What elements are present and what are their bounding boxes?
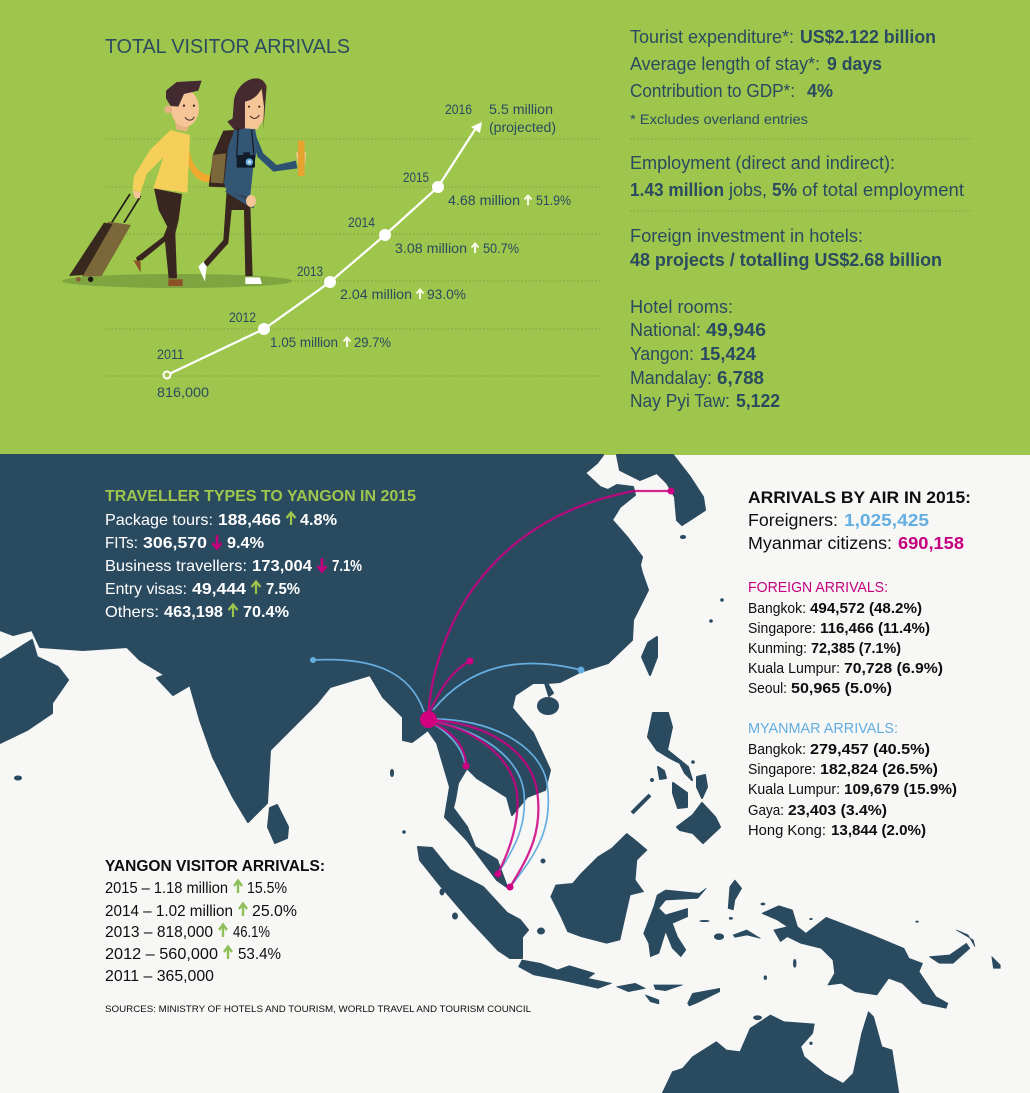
stats: tourism figures [630, 27, 936, 127]
stats: foreign investment: Foreign investment in hotels: [630, 226, 863, 246]
icon: suitcase [69, 194, 141, 282]
list: Myanmar arrivals: 23,403 (3.4%) [788, 803, 887, 819]
list: Myanmar arrivals: Gaya: [748, 803, 784, 819]
list: foreign arrivals: 50,965 (5.0%) [791, 681, 892, 697]
stats: hotel rooms: 6,788 [717, 368, 764, 388]
panel: Yangon visitor arrivals: 2015 – 1.18 million [105, 880, 228, 897]
panel: Yangon visitor arrivals [105, 858, 325, 985]
man [133, 81, 235, 286]
label: 2013 [297, 264, 466, 302]
label: 2014: 3.08 million [395, 241, 467, 256]
stats: hotel rooms: Hotel rooms: [630, 297, 733, 317]
row: FITs [105, 535, 264, 552]
stats: foreign investment [630, 226, 942, 270]
label: 2012: 29.7% [354, 335, 391, 350]
title: total visitor arrivals: TOTAL VISITOR ARRIVALS [105, 36, 350, 58]
row: business travellers: Business travellers: [105, 558, 247, 575]
stats: tourism figures: 9 days [827, 54, 882, 74]
heading: YANGON VISITOR ARRIVALS: [105, 858, 325, 875]
label: 2016 [445, 102, 556, 135]
label: 2016: (projected) [489, 120, 556, 135]
list: foreign arrivals: Kuala Lumpur: [748, 661, 840, 677]
stats: hotel rooms: Nay Pyi Taw: [630, 391, 730, 411]
panel: Yangon visitor arrivals: 2012 – 560,000 [105, 946, 218, 963]
stats: tourism figures: 4% [807, 81, 833, 101]
route: Seoul [428, 491, 671, 719]
list: foreign arrivals [748, 580, 943, 697]
panel: Yangon visitor arrivals: 2014 – 1.02 million [105, 903, 233, 920]
list: foreign arrivals: 494,572 (48.2%) [810, 601, 922, 617]
row: others: 463,198 [164, 604, 223, 621]
row: entry visas [105, 581, 300, 598]
label: 2012: 1.05 million [270, 335, 338, 350]
land: mainland Asia [0, 455, 648, 887]
stats: employment: jobs, [728, 180, 767, 200]
list: Myanmar arrivals: MYANMAR ARRIVALS: [748, 721, 898, 737]
stats: hotel rooms: Yangon: [630, 344, 694, 364]
list: Myanmar arrivals: 109,679 (15.9%) [844, 782, 957, 798]
routes: Kuala Lumpur [430, 721, 524, 873]
row: others: Others: [105, 604, 159, 621]
stats: tourism figures: US$2.122 billion [800, 27, 936, 47]
heading: ARRIVALS BY AIR IN 2015: [748, 488, 971, 507]
route: Gaya [313, 660, 424, 712]
map: South-East Asia [0, 455, 1000, 1093]
panel: arrivals by air: Myanmar citizens: [748, 533, 892, 553]
list: Myanmar arrivals: Singapore: [748, 762, 816, 778]
label: 2011: 2011 [157, 347, 184, 362]
stats: hotel rooms: Mandalay: [630, 368, 712, 388]
stats: tourism figures: * Excludes overland entries [630, 112, 808, 127]
row: package tours: 4.8% [300, 512, 337, 529]
land: Sri Lanka [268, 805, 288, 843]
label: 2012 [229, 310, 391, 350]
label: 2016: 2016 [445, 102, 472, 117]
panel: Yangon visitor arrivals: 53.4% [238, 946, 281, 963]
panel: arrivals by air: 690,158 [898, 533, 964, 553]
line chart: arrivals 2011-2016 [157, 102, 571, 400]
panel: Yangon visitor arrivals: 25.0% [252, 903, 297, 920]
route: Bangkok [430, 722, 465, 764]
list: Myanmar arrivals: 13,844 (2.0%) [831, 823, 926, 839]
row: entry visas: 49,444 [192, 581, 246, 598]
label: 2015: 2015 [403, 170, 429, 185]
panel: arrivals by air: Foreigners: [748, 510, 838, 530]
stats: hotel rooms: 15,424 [700, 344, 756, 364]
heading: TRAVELLER TYPES TO YANGON IN 2015 [105, 488, 416, 505]
label: 2015: 4.68 million [448, 193, 520, 208]
row: FITs: 9.4% [227, 535, 264, 552]
stats: employment: of total employment [802, 180, 964, 200]
list: Myanmar arrivals: Kuala Lumpur: [748, 782, 840, 798]
stats: employment: Employment (direct and indirect): [630, 153, 895, 173]
label: 2016: 5.5 million [489, 102, 553, 117]
label: 2013: 93.0% [427, 287, 466, 302]
route: Kunming [428, 661, 470, 715]
land: Philippines [648, 713, 692, 780]
stats: tourism figures: Average length of stay*: [630, 54, 820, 74]
list: Myanmar arrivals: 182,824 (26.5%) [820, 762, 938, 778]
stats: employment [630, 153, 964, 200]
stats: hotel rooms [630, 297, 780, 411]
ground shadow [62, 274, 293, 288]
icon: camera [237, 152, 255, 168]
row: FITs: 306,570 [143, 535, 207, 552]
land: Sumatra [418, 847, 528, 958]
list: foreign arrivals: Singapore: [748, 621, 816, 637]
row: business travellers [105, 558, 362, 575]
label: 2012: 2012 [229, 310, 256, 325]
land: Taiwan [642, 637, 657, 675]
label: 2014 [348, 215, 519, 256]
stats: hotel rooms: National: [630, 320, 701, 340]
label: 2015: 51.9% [536, 193, 571, 208]
stats: hotel rooms: 5,122 [736, 391, 780, 411]
land: eastern Indonesia, New Guinea, Australia [519, 833, 1000, 1093]
routes: Singapore [430, 719, 548, 887]
row: package tours: 188,466 [218, 512, 281, 529]
panel: Yangon visitor arrivals: 2013 – 818,000 [105, 924, 213, 941]
land: Korea [617, 455, 705, 525]
stats: foreign investment: 48 projects / totalling US$2.68 billion [630, 250, 942, 270]
row: entry visas: Entry visas: [105, 581, 187, 598]
list: foreign arrivals: Bangkok: [748, 601, 806, 617]
row: package tours [105, 512, 337, 529]
list: foreign arrivals: 116,466 (11.4%) [820, 621, 930, 637]
row: others [105, 604, 289, 621]
row: package tours: Package tours: [105, 512, 213, 529]
label: 2011 [157, 347, 209, 400]
row: FITs: FITs: [105, 535, 138, 552]
route: Hong Kong [433, 663, 581, 710]
label: 2014: 2014 [348, 215, 375, 230]
stats: hotel rooms: 49,946 [706, 320, 766, 340]
row: entry visas: 7.5% [266, 581, 300, 598]
row: business travellers: 173,004 [252, 558, 312, 575]
stats: employment: 5% [772, 180, 797, 200]
row: business travellers: 7.1% [332, 558, 362, 575]
land: Arabia [0, 640, 68, 743]
sources: SOURCES: MINISTRY OF HOTELS AND TOURISM, WORLD TRAVEL AND TOURISM COUNCIL [105, 1004, 531, 1015]
label: 2015 [403, 170, 571, 208]
stats: employment: 1.43 million [630, 180, 724, 200]
label: 2013: 2.04 million [340, 287, 412, 302]
list: foreign arrivals: 70,728 (6.9%) [844, 661, 943, 677]
panel: Yangon visitor arrivals: 46.1% [233, 924, 270, 941]
panel: traveller types [105, 488, 416, 621]
panel: Yangon visitor arrivals: 15.5% [247, 880, 287, 897]
label: 2014: 50.7% [483, 241, 519, 256]
list: Myanmar arrivals: Bangkok: [748, 742, 806, 758]
list: foreign arrivals: FOREIGN ARRIVALS: [748, 580, 888, 596]
illustration: two travellers [62, 78, 306, 288]
flight routes from Yangon [310, 488, 674, 890]
woman [198, 78, 306, 284]
panel: arrivals by air: 1,025,425 [844, 510, 929, 530]
panel: arrivals by air [748, 488, 971, 553]
panel: Yangon visitor arrivals: 2011 – 365,000 [105, 968, 214, 985]
stats: tourism figures: Tourist expenditure*: [630, 27, 794, 47]
list: foreign arrivals: Kunming: [748, 641, 807, 657]
label: 2013: 2013 [297, 264, 323, 279]
stats: tourism figures: Contribution to GDP*: [630, 81, 795, 101]
land: Hainan [538, 698, 558, 714]
hub: Yangon [420, 711, 437, 728]
list: Myanmar arrivals: 279,457 (40.5%) [810, 742, 930, 758]
list: foreign arrivals: Seoul: [748, 681, 787, 697]
label: 2011: 816,000 [157, 385, 209, 400]
list: foreign arrivals: 72,385 (7.1%) [811, 641, 901, 657]
list: Myanmar arrivals: Hong Kong: [748, 823, 826, 839]
list: Myanmar arrivals [748, 721, 957, 839]
row: others: 70.4% [243, 604, 289, 621]
